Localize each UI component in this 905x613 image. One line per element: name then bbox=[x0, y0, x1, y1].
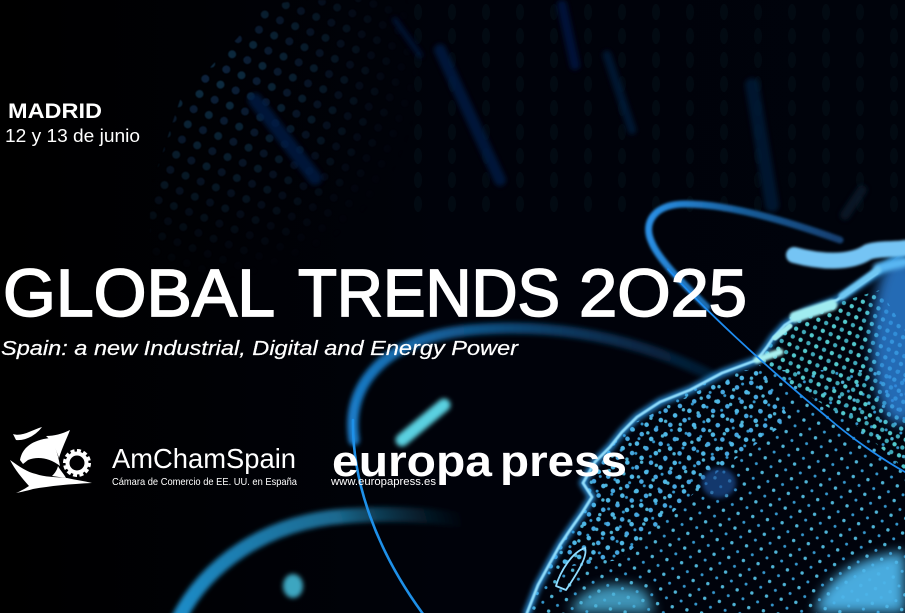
subtitle: Spain: a new Industrial, Digital and Energy Power bbox=[1, 337, 519, 360]
title: GLOBAL bbox=[3, 256, 275, 331]
url: www.europapress.es bbox=[330, 476, 437, 488]
logo: europa press bbox=[330, 437, 627, 488]
title: TRENDS bbox=[298, 256, 560, 331]
globe: glowing coastline bbox=[527, 248, 905, 613]
bottom arc bbox=[178, 514, 462, 613]
location and date bbox=[5, 99, 140, 146]
location: MADRID bbox=[8, 99, 102, 123]
title bbox=[3, 256, 747, 331]
background: faint dotted globe and light streaks bbox=[150, 0, 868, 251]
top orbit arc bbox=[649, 204, 905, 472]
gear teeth bbox=[64, 450, 90, 476]
wordmark: europa: europa bbox=[332, 437, 493, 486]
tagline: Cámara de Comercio de EE. UU. en España bbox=[112, 476, 297, 488]
icon: ship and gear bbox=[10, 427, 92, 493]
globe: dotted continent bbox=[520, 240, 905, 613]
logo: AmChamSpain bbox=[10, 427, 297, 493]
date: 12 y 13 de junio bbox=[5, 126, 140, 146]
title: 2O25 bbox=[579, 256, 747, 331]
light capsule bbox=[402, 405, 444, 440]
large blue arc bbox=[353, 328, 712, 613]
wordmark: press: press bbox=[500, 437, 627, 486]
icon: gear bbox=[68, 454, 86, 472]
light dot bbox=[283, 574, 303, 598]
wordmark: AmChamSpain bbox=[112, 443, 296, 474]
